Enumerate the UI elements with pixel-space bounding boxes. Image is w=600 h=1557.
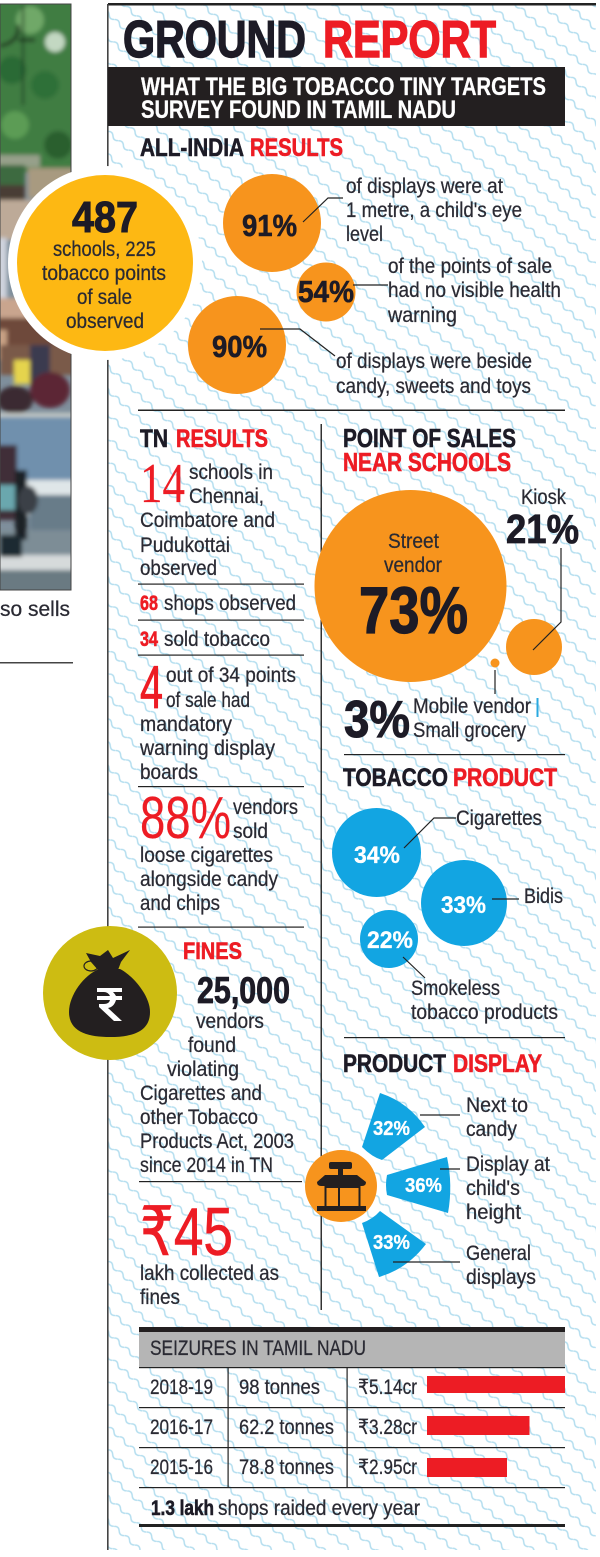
heading: point of sales bbox=[343, 423, 516, 477]
panel: street photo bbox=[0, 4, 72, 590]
callout: 487 schools: schools, 225 bbox=[53, 238, 156, 261]
row: 2016-17: 2016-17 bbox=[150, 1416, 213, 1439]
stat: 90 percent: candy, sweets and toys bbox=[336, 375, 531, 398]
row: 2015-16: ₹2.95cr bbox=[358, 1456, 417, 1479]
stat: 4 out of 34: boards bbox=[140, 761, 198, 784]
stat: 4 out of 34: warning display bbox=[139, 737, 275, 760]
bubble: bidis bbox=[421, 860, 563, 946]
heading: TN results bbox=[140, 425, 268, 453]
stat: fines 25,000 vendors: FINES bbox=[183, 938, 242, 965]
stat: 14 schools: Chennai, bbox=[189, 485, 264, 508]
wedge: general displays bbox=[362, 1211, 536, 1289]
wedge: next to candy: Next to bbox=[466, 1094, 528, 1117]
stat: 14 schools: Coimbatore and bbox=[140, 509, 275, 532]
stat: 88 percent vendors: and chips bbox=[140, 892, 220, 915]
table footer: shops raided every year bbox=[218, 1497, 420, 1520]
row: 2015-16: 78.8 tonnes bbox=[239, 1456, 334, 1479]
stat: 88 percent vendors bbox=[140, 785, 298, 915]
stat: fines 25,000 vendors bbox=[140, 938, 294, 1177]
stat: 4 out of 34: mandatory bbox=[140, 713, 232, 736]
bubble: mobile vendor and small grocery: Mobile vendor bbox=[413, 695, 531, 718]
bubble: bidis: 33% bbox=[441, 892, 486, 919]
stat: 68 shops: shops observed bbox=[164, 592, 296, 615]
bubble: street vendor: 73% bbox=[359, 573, 468, 647]
section rule bbox=[344, 754, 565, 755]
bubble: street vendor: Street bbox=[388, 530, 439, 553]
stat: fines 25,000 vendors: since 2014 in TN bbox=[140, 1154, 273, 1177]
bubble: kiosk bbox=[506, 486, 579, 675]
stat: 4 out of 34: of sale had bbox=[166, 689, 250, 712]
stat: 45 lakh collected bbox=[140, 1194, 279, 1309]
stat: 45 lakh collected: ₹45 bbox=[140, 1194, 233, 1270]
stat: 88 percent vendors: 88% bbox=[140, 785, 231, 851]
stat: 14 schools: 14 bbox=[140, 453, 185, 515]
row: 2016-17: ₹3.28cr bbox=[358, 1416, 417, 1439]
panel: tobacco product bbox=[332, 764, 563, 1024]
caption rule bbox=[0, 662, 73, 664]
subtitle bar bbox=[108, 67, 565, 126]
row: 2015-16: 2015-16 bbox=[150, 1456, 213, 1479]
bubble: mobile vendor and small grocery: Small grocery bbox=[413, 719, 526, 742]
wedge: next to candy: candy bbox=[466, 1118, 517, 1141]
wedge: display at child's height: Display at bbox=[466, 1153, 550, 1176]
stat: 90 percent: 90% bbox=[212, 329, 267, 364]
stat: 54 percent: of the points of sale bbox=[388, 255, 552, 278]
bubble: kiosk: Kiosk bbox=[521, 486, 566, 509]
heading: all-india results bbox=[140, 134, 343, 162]
heading: all-india results: RESULTS bbox=[250, 134, 343, 162]
heading: product display: DISPLAY bbox=[453, 1050, 542, 1078]
table: seizures in Tamil Nadu: SEIZURES IN TAMIL NADU bbox=[150, 1337, 366, 1360]
heading: all-india results: ALL-INDIA bbox=[140, 134, 244, 162]
icon: money bag bbox=[43, 926, 177, 1060]
heading: tobacco product: TOBACCO bbox=[343, 764, 448, 792]
bubble: smokeless tobacco: Smokeless bbox=[411, 977, 500, 1000]
stat: 14 schools bbox=[140, 453, 275, 580]
stat: 90 percent: of displays were beside bbox=[336, 350, 532, 373]
callout: 487 schools: tobacco points bbox=[42, 262, 166, 285]
stat: fines 25,000 vendors: other Tobacco bbox=[140, 1106, 258, 1129]
row: 2015-16 bbox=[150, 1456, 507, 1479]
stat: 54 percent: warning bbox=[387, 304, 457, 327]
column divider bbox=[320, 424, 322, 1310]
table: seizures in Tamil Nadu bbox=[139, 1327, 565, 1527]
panel: TN results bbox=[138, 425, 304, 1309]
stat: 91 percent bbox=[223, 174, 522, 272]
heading: TN results: TN bbox=[140, 425, 168, 453]
stat: 54 percent: 54% bbox=[298, 274, 354, 309]
stat: 14 schools: Pudukottai bbox=[140, 534, 230, 557]
table footer bbox=[151, 1497, 420, 1520]
bubble: cigarettes: Cigarettes bbox=[456, 807, 542, 830]
stat: 88 percent vendors: loose cigarettes bbox=[140, 844, 273, 867]
stat: 4 out of 34: 4 bbox=[140, 654, 163, 721]
stat: 14 schools: schools in bbox=[189, 461, 273, 484]
section rule bbox=[344, 1037, 565, 1038]
callout: 487 schools: of sale bbox=[77, 286, 132, 309]
row: 2016-17 bbox=[150, 1416, 530, 1439]
stat: 34 sold tobacco: 34 bbox=[140, 628, 158, 651]
wedge: display at child's height: child's bbox=[466, 1177, 520, 1200]
callout: 487 schools: 487 bbox=[72, 193, 138, 242]
icon: shop bbox=[305, 1150, 377, 1222]
bubble: mobile vendor and small grocery bbox=[344, 658, 538, 749]
wedge: display at child's height: height bbox=[466, 1201, 521, 1224]
subtitle bar: SURVEY FOUND IN TAMIL NADU bbox=[141, 96, 456, 124]
bubble: street vendor: vendor bbox=[384, 554, 442, 577]
stat: 34 sold tobacco: sold tobacco bbox=[164, 628, 270, 651]
stat: 54 percent: had no visible health bbox=[388, 279, 561, 302]
stat: 88 percent vendors: vendors bbox=[233, 796, 298, 819]
stat: 91 percent: 1 metre, a child's eye bbox=[346, 199, 522, 222]
stat: 91 percent: 91% bbox=[242, 208, 297, 243]
stat: 88 percent vendors: sold bbox=[233, 820, 268, 843]
bubble: kiosk: 21% bbox=[506, 506, 579, 552]
row: 2018-19: 2018-19 bbox=[150, 1376, 213, 1399]
bubble: cigarettes: 34% bbox=[354, 842, 400, 869]
panel: product display bbox=[305, 1050, 550, 1289]
bubble: cigarettes bbox=[332, 807, 542, 897]
heading: point of sales: POINT OF SALES bbox=[343, 423, 516, 453]
stat: 4 out of 34 bbox=[139, 654, 296, 784]
wedge: display at child's height bbox=[386, 1153, 550, 1224]
section rule bbox=[138, 410, 565, 411]
title: REPORT bbox=[323, 11, 496, 69]
stat: 45 lakh collected: fines bbox=[140, 1286, 180, 1309]
bubble: smokeless tobacco: tobacco products bbox=[411, 1001, 558, 1024]
stat: 45 lakh collected: lakh collected as bbox=[140, 1262, 279, 1285]
stat: 54 percent bbox=[296, 255, 561, 327]
heading: tobacco product: PRODUCT bbox=[453, 764, 557, 792]
wedge: general displays: 33% bbox=[373, 1232, 410, 1254]
callout: 487 schools bbox=[8, 166, 202, 360]
stat: fines 25,000 vendors: found bbox=[188, 1034, 236, 1057]
stat: 91 percent: level bbox=[346, 223, 383, 246]
wedge: next to candy: 32% bbox=[373, 1118, 410, 1140]
stat: fines 25,000 vendors: Cigarettes and bbox=[140, 1082, 262, 1105]
wedge: general displays: General bbox=[466, 1242, 531, 1265]
title bbox=[123, 11, 496, 69]
stat: 88 percent vendors: alongside candy bbox=[140, 868, 278, 891]
row: 2018-19: 98 tonnes bbox=[239, 1376, 320, 1399]
panel: point of sales near schools bbox=[314, 423, 579, 749]
bubble: smokeless tobacco: 22% bbox=[367, 927, 413, 954]
heading: product display bbox=[343, 1050, 542, 1078]
stat: fines 25,000 vendors: vendors bbox=[196, 1010, 264, 1033]
stat: fines 25,000 vendors: Products Act, 2003 bbox=[140, 1130, 294, 1153]
wedge: display at child's height: 36% bbox=[405, 1175, 442, 1197]
heading: tobacco product bbox=[343, 764, 557, 792]
stat: fines 25,000 vendors: 25,000 bbox=[197, 970, 290, 1011]
bubble: mobile vendor and small grocery: 3% bbox=[344, 691, 410, 749]
stat: 68 shops: 68 bbox=[140, 592, 158, 615]
stat: 14 schools: observed bbox=[140, 557, 217, 580]
wedge: next to candy bbox=[362, 1093, 528, 1160]
table footer: 1.3 lakh bbox=[151, 1497, 214, 1520]
row: 2016-17: 62.2 tonnes bbox=[239, 1416, 334, 1439]
row: 2018-19 bbox=[150, 1376, 565, 1399]
heading: TN results: RESULTS bbox=[176, 425, 268, 453]
stat: fines 25,000 vendors: violating bbox=[167, 1058, 239, 1081]
stat: 4 out of 34: out of 34 points bbox=[166, 664, 296, 687]
callout: 487 schools: observed bbox=[66, 310, 144, 333]
stat: 91 percent: of displays were at bbox=[346, 175, 503, 198]
bubble: bidis: Bidis bbox=[524, 885, 563, 908]
heading: product display: PRODUCT bbox=[343, 1050, 446, 1078]
bubble: smokeless tobacco bbox=[360, 910, 558, 1024]
title: GROUND bbox=[123, 11, 306, 69]
wedge: general displays: displays bbox=[466, 1266, 536, 1289]
bubble: street vendor bbox=[314, 490, 506, 682]
photo caption: so sells bbox=[0, 598, 70, 621]
row: 2018-19: ₹5.14cr bbox=[358, 1376, 417, 1399]
heading: point of sales: NEAR SCHOOLS bbox=[343, 447, 511, 477]
stat: 90 percent bbox=[188, 296, 532, 398]
